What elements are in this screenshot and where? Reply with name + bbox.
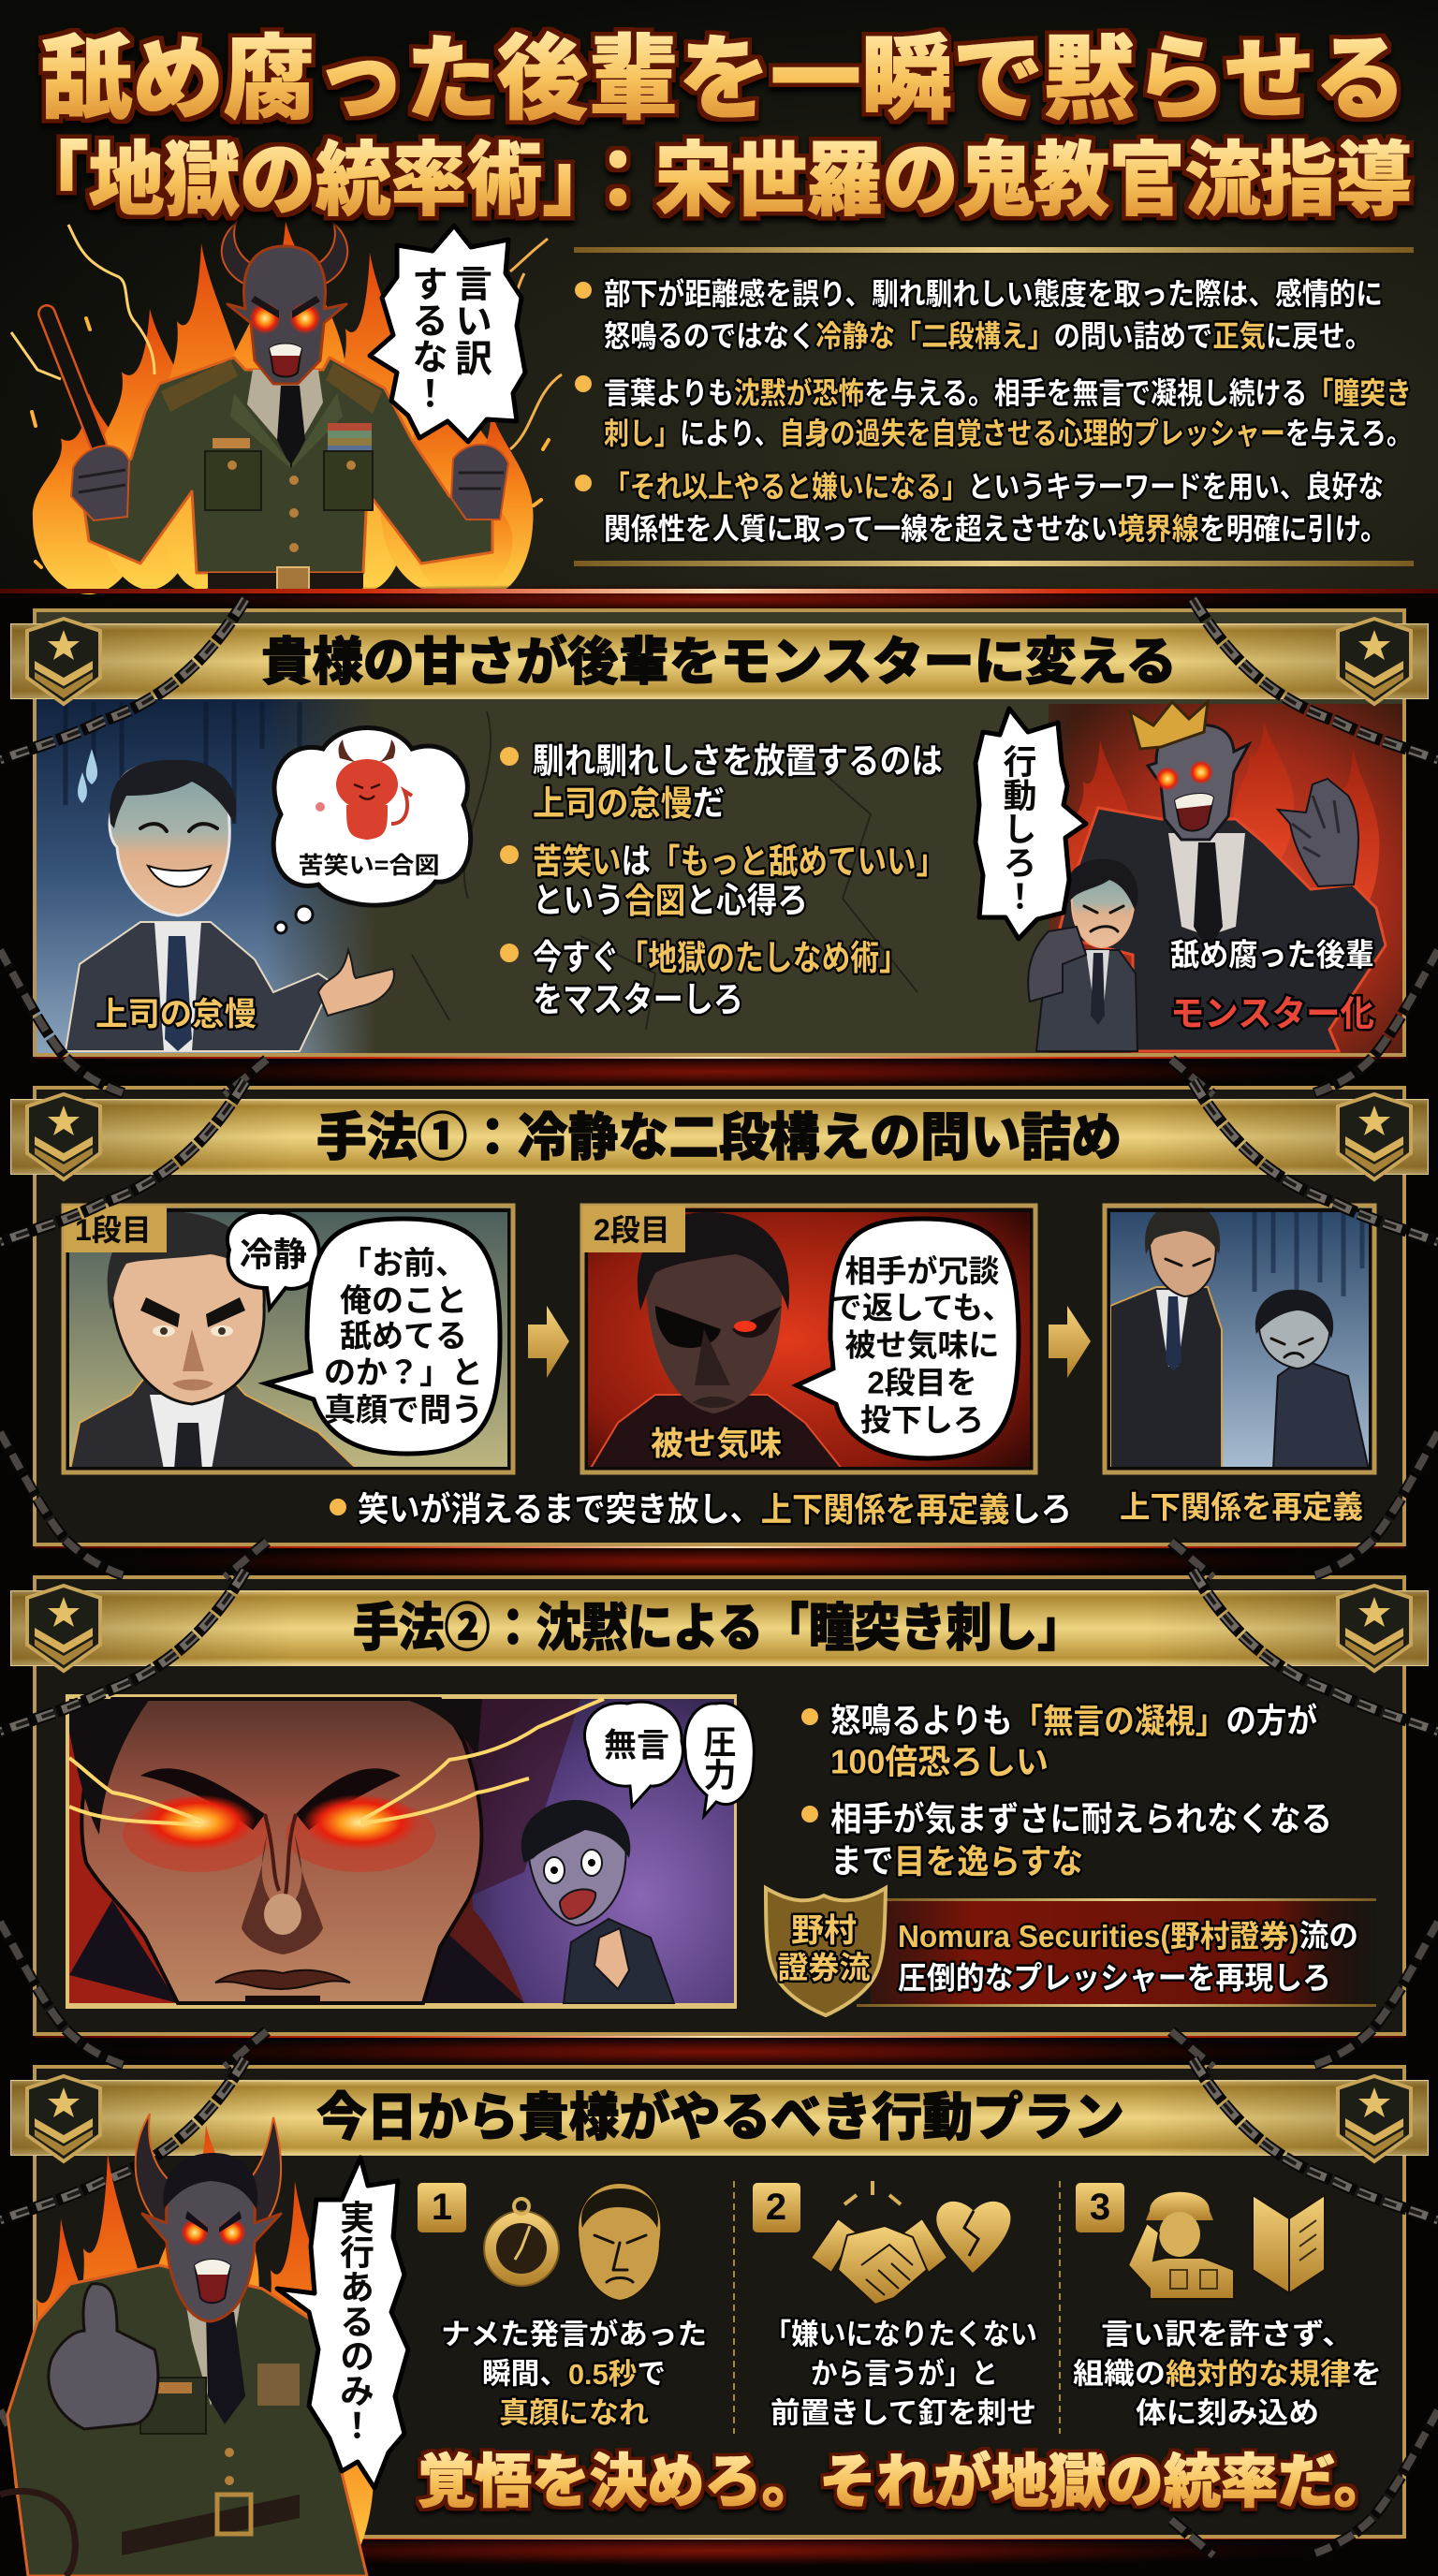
demon jacket: [82, 358, 492, 573]
boss suit: [66, 922, 332, 1051]
shadowed man: [590, 1212, 843, 1470]
step 3: 言い訳を許さず、: [1101, 2318, 1354, 2351]
demon jacket: [7, 2265, 367, 2576]
monster hand on shoulder: [1028, 927, 1086, 1002]
panel: section 2 method one: [35, 1088, 1404, 1544]
panel: section 4 action plan: [35, 2067, 1404, 2537]
bubble: main step 1: 「お前、: [340, 1246, 467, 1281]
panel 3 frame: [1105, 1206, 1374, 1472]
bullet list: hero: 怒鳴るのではなく冷静な「二段構え」の問い詰めで正気に戻せ。: [604, 319, 1372, 353]
bullet list: section 1: 苦笑いは「もっと舐めていい」: [533, 842, 946, 880]
icon: shield: [766, 1888, 886, 2015]
speech bubble: 言い訳するな: [370, 226, 525, 442]
bullet list: section 1: 馴れ馴れしさを放置するのは: [533, 741, 943, 781]
step 2: [753, 2181, 1037, 2430]
glow divider 4: [35, 2033, 1404, 2069]
banner: section 4: 今日から貴様がやるべき行動プラン: [316, 2088, 1124, 2146]
step 3: 体に刻み込め: [1136, 2396, 1319, 2430]
suit of big face: [69, 1900, 524, 2003]
bubble: 圧力: 圧力: [698, 1725, 736, 1791]
bubble: main step 1: [266, 1219, 500, 1454]
chains over section 2: [0, 1081, 1438, 1577]
comic panel: step 2: [582, 1206, 1035, 1472]
banner: section 3: 手法②：沈黙による「瞳突き刺し」: [353, 1599, 1083, 1657]
label: 被せ気味: 被せ気味: [651, 1427, 782, 1462]
frightened small man: [1036, 859, 1138, 1051]
frightened man: [521, 1800, 674, 2003]
glowing eyes: [139, 1794, 418, 1851]
divider top: [574, 247, 1414, 253]
step 1: 真顔になれ: [499, 2396, 649, 2430]
label tag: 1段目: [64, 1206, 167, 1252]
speech bubble: 行動しろ: [976, 709, 1086, 939]
label tag: 1段目: 1段目: [75, 1213, 152, 1247]
icon: crown: [1130, 702, 1208, 749]
bubble: main step 2: [797, 1219, 1019, 1458]
illustration: pointing demon: [0, 2114, 374, 2576]
panel 1 frame: [64, 1206, 513, 1472]
caption: 上下関係を再定義: 上下関係を再定義: [1120, 1490, 1363, 1524]
step 1: [418, 2183, 707, 2430]
panel 2 frame: [582, 1206, 1035, 1472]
bubble: main step 1: のか？」と: [324, 1355, 483, 1391]
divider 1: [733, 2181, 735, 2434]
bullet list: hero: 刺し」により、自身の過失を自覚させる心理的プレッシャーを与えろ。: [604, 417, 1412, 450]
panel: hero: [0, 0, 1438, 594]
monster suit: [1058, 808, 1386, 1051]
speech bubble: 行動しろ: 行動しろ！: [998, 744, 1037, 913]
step 1: 1: [432, 2187, 452, 2228]
divider 2: [1059, 2181, 1061, 2434]
title line 1: 舐め腐った後輩を一瞬で黙らせる: [41, 27, 1406, 130]
bullet list: section 3: 怒鳴るよりも「無言の凝視」の方が: [830, 1702, 1317, 1739]
whip: [0, 2491, 75, 2576]
callout: Nomura Securities: Nomura Securities(野村證券)流の: [898, 1919, 1358, 1953]
icon: rank badges section 1: [27, 619, 1411, 704]
banner: section 3: [11, 1591, 1428, 1665]
demon head: [142, 2162, 281, 2321]
arrow 1: [528, 1306, 569, 1378]
bubble: 冷静: [227, 1212, 319, 1309]
bullet list: section 3: [801, 1702, 1332, 1880]
step 3: 3: [1090, 2187, 1110, 2228]
step 2: から言うが」と: [811, 2357, 998, 2391]
bubble: 冷静: 冷静: [240, 1236, 307, 1273]
banner: section 4: [11, 2081, 1428, 2155]
icon: little red devil: [315, 739, 412, 840]
step 2: 前置きして釘を刺せ: [770, 2396, 1036, 2430]
icon: rank badges section 4: [27, 2076, 1411, 2161]
banner: section 2: 手法①：冷静な二段構えの問い詰め: [316, 1108, 1122, 1166]
right panel: monster junior: [992, 702, 1402, 1053]
glow divider 3: [35, 1544, 1404, 1578]
banner: section 2: [11, 1100, 1428, 1174]
standing boss: [1110, 1203, 1222, 1470]
arrow 2: [1049, 1306, 1091, 1378]
nose: [242, 1835, 323, 1954]
step 1: 瞬間、0.5秒で: [482, 2357, 666, 2391]
thought bubble: [273, 728, 471, 933]
step 2: 2: [766, 2187, 786, 2228]
icon: shield: 野村: [791, 1913, 857, 1949]
comic panel: step 1: [64, 1206, 513, 1472]
bullet list: hero: [575, 277, 1412, 546]
bubble: main step 1: 真顔で問う: [324, 1393, 483, 1428]
glow divider 1: [0, 584, 1438, 614]
chains over section 4: [0, 2059, 1438, 2555]
chains over section 1: [0, 599, 1438, 1095]
caption: bullet: 笑いが消えるまで突き放し、上下関係を再定義しろ: [358, 1490, 1072, 1528]
divider bottom: [574, 561, 1414, 566]
demon horns: [222, 223, 347, 288]
banner: section 1: 貴様の甘さが後輩をモンスターに変える: [261, 633, 1177, 691]
icon: baton: [47, 314, 98, 445]
label tag: 2段目: [582, 1206, 685, 1252]
callout: Nomura Securities: 圧倒的なプレッシャーを再現しろ: [898, 1960, 1331, 1996]
boss hand: [318, 950, 394, 1016]
bubble: main step 1: 俺のこと: [340, 1283, 467, 1319]
mouth: [215, 1970, 350, 1989]
speech bubble: 実行あるのみ: 実行あるのみ！: [335, 2200, 374, 2442]
big face: [81, 1699, 481, 2003]
icon: shield: 證券流: [777, 1951, 871, 1984]
glow divider 5: [35, 2534, 1404, 2568]
bowing subordinate: [1255, 1290, 1369, 1470]
icon: stopwatch: [484, 2199, 559, 2286]
calm man: [70, 1212, 358, 1470]
bubble: main step 2: 被せ気味に: [844, 1327, 1000, 1363]
icon: stern face: [578, 2183, 661, 2301]
bubble: 無言: [584, 1702, 682, 1807]
icon: book: [1253, 2195, 1325, 2293]
callout: Nomura Securities: [766, 1888, 1376, 2015]
bullet list: section 1: をマスターしろ: [533, 981, 743, 1018]
demon fists: [71, 446, 129, 520]
bullet list: section 1: 上司の怠慢だ: [533, 784, 725, 822]
bullet list: section 3: まで目を逸らすな: [830, 1842, 1083, 1880]
speech bubble: 言い訳するな: するな！: [406, 265, 448, 411]
step 3: 組織の絶対的な規律 を: [1073, 2357, 1382, 2391]
bullet list: section 3: 相手が気まずさに耐えられなくなる: [830, 1799, 1332, 1838]
panel: section 1 monster warning: [35, 610, 1404, 1055]
thought bubble: 苦笑い=合図: [298, 853, 440, 879]
monster raised hand: [1278, 779, 1358, 886]
bubble: main step 2: 2段目を: [867, 1365, 977, 1400]
label tag: 2段目: 2段目: [594, 1213, 670, 1247]
label: 上司の怠慢: 上司の怠慢: [95, 996, 257, 1033]
bubble: 無言: 無言: [604, 1728, 669, 1764]
bubble: main step 2: で返しても、: [831, 1290, 1013, 1325]
icon: rank badges section 2: [27, 1094, 1411, 1179]
bullet list: section 1: という合図と心得ろ: [533, 882, 808, 919]
illustration: demon instructor in flames: [11, 221, 562, 594]
chains over section 3: [0, 1571, 1438, 2067]
bullet list: hero: 言葉よりも沈黙が恐怖を与える。相手を無言で凝視し続ける「瞳突き: [604, 376, 1412, 410]
bubble: 圧力: [684, 1703, 754, 1816]
step 1: ナメた発言があった: [441, 2318, 707, 2351]
demon head: [227, 246, 346, 384]
glow divider 2: [35, 1054, 1404, 1089]
icon: handshake: [811, 2218, 947, 2305]
speech bubble: 言い訳するな: 言い訳: [449, 264, 492, 376]
icon: saluting soldier: [1128, 2192, 1234, 2299]
brows: [140, 1768, 401, 1830]
bullet list: section 3: 100倍恐ろしい: [830, 1743, 1049, 1780]
bubble: main step 2: 相手が冗談: [844, 1254, 1000, 1288]
demon pointing fist: [49, 2284, 158, 2429]
illustration: glaring face and frightened man: [66, 1694, 754, 2009]
label: 舐め腐った後輩: 舐め腐った後輩: [1170, 938, 1374, 972]
boss head: [110, 763, 229, 915]
demon horns: [136, 2114, 281, 2232]
step 2: 「嫌いになりたくない: [764, 2318, 1037, 2351]
speech bubble: 実行あるのみ: [277, 2158, 408, 2488]
closing slogan: 覚悟を決めろ。それが地獄の統率だ。: [418, 2449, 1391, 2514]
comic panel: step 3: [1105, 1203, 1374, 1472]
bullet list: section 1: [500, 741, 946, 1018]
step 3: [1073, 2183, 1382, 2430]
lightning beams: [69, 1699, 604, 1825]
bullet list: hero: 関係性を人質に取って一線を超えさせない境界線を明確に引け。: [604, 512, 1387, 546]
monster head: [1148, 724, 1249, 840]
bullet list: section 1: 今すぐ「地獄のたしなめ術」: [533, 938, 908, 977]
icon: rank badges section 3: [27, 1586, 1411, 1671]
banner: section 1: [11, 624, 1428, 698]
icon: sweat drops: [78, 749, 97, 803]
bullet list: hero: 「それ以上やると嫌いになる」というキラーワードを用い、良好な: [604, 470, 1384, 504]
bubble: main step 2: 投下しろ: [860, 1402, 984, 1438]
icon: broken chain: [844, 2181, 901, 2204]
left panel: complacent boss: [37, 698, 471, 1053]
panel: section 3 method two: [35, 1577, 1404, 2034]
icon: broken heart: [936, 2202, 1010, 2273]
bubble: main step 1: 舐めてる: [340, 1319, 467, 1354]
label: モンスター化: モンスター化: [1170, 995, 1374, 1034]
